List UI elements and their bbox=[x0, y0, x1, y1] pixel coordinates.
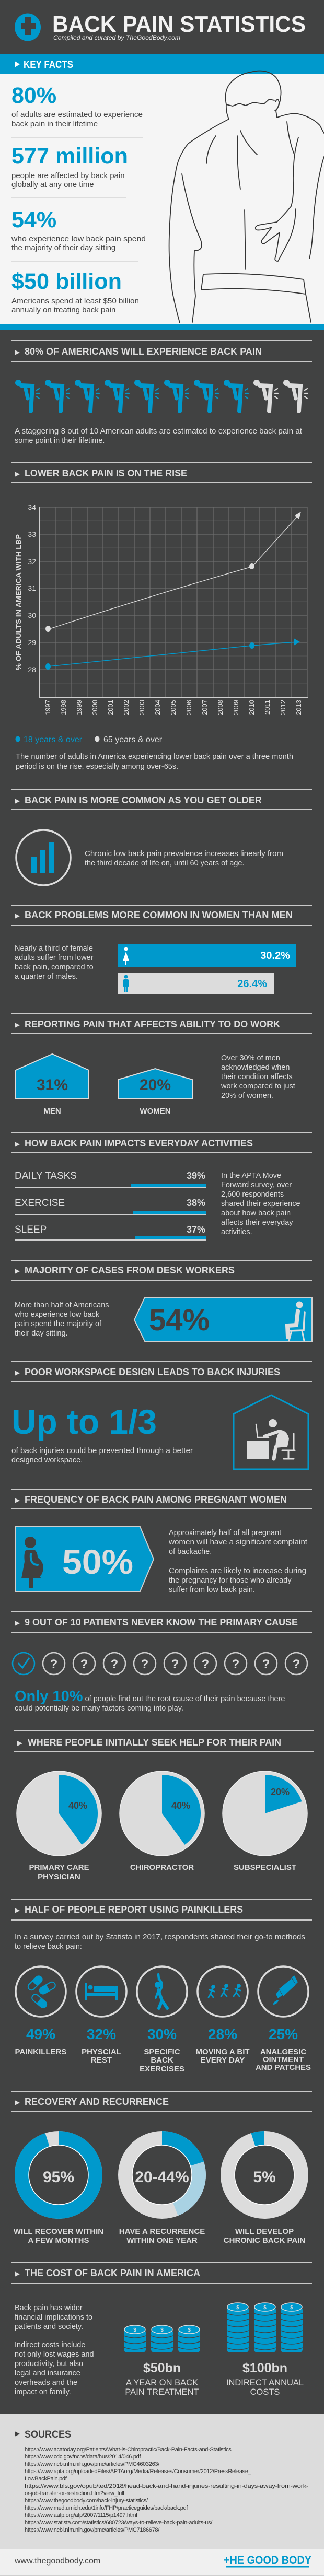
fact: 54%: 54% bbox=[11, 207, 56, 232]
fact: 577 million: people are affected by back pain bbox=[11, 171, 125, 180]
text: only 10%: Only 10% of people find out the root cause of their pain because there bbox=[15, 1688, 285, 1705]
donut: 5%: CHRONIC BACK PAIN bbox=[224, 2236, 305, 2245]
icons: check and question circles: ? bbox=[111, 1657, 118, 1671]
item: ointment 25%: AND PATCHES bbox=[256, 2063, 311, 2072]
text: women: adults suffer from lower bbox=[15, 954, 94, 962]
coins: $50bn stacks: $ bbox=[188, 2327, 191, 2333]
text: desk: who experience low back bbox=[14, 1310, 100, 1319]
text: APTA: In the APTA Move bbox=[221, 1172, 281, 1180]
icons: check and question circles: ? bbox=[50, 1657, 57, 1671]
text: APTA: activities. bbox=[221, 1228, 252, 1236]
bars: activities: SLEEP bbox=[15, 1224, 47, 1235]
icons: check and question circles: ? bbox=[262, 1657, 270, 1671]
coins: $50bn stacks: $ bbox=[133, 2327, 136, 2333]
text: cost: Indirect costs include bbox=[15, 2341, 85, 2349]
y axis labels: 31 bbox=[28, 584, 36, 592]
series: 65 and over bbox=[45, 512, 301, 632]
icon: plus logo bbox=[15, 14, 41, 41]
text: desk: More than half of Americans bbox=[15, 1301, 109, 1309]
text: desk: their day sitting. bbox=[15, 1329, 68, 1338]
y axis labels bbox=[28, 503, 36, 674]
x axis year labels: 2013 bbox=[295, 700, 303, 715]
heading: lower back pain: LOWER BACK PAIN IS ON THE RISE bbox=[25, 468, 187, 478]
legend: 18 years & over bbox=[24, 735, 83, 744]
stat: $100bn bbox=[226, 2361, 304, 2397]
coins: $100bn stacks bbox=[227, 2303, 303, 2352]
text: staggering: A staggering 8 out of 10 American adults are estimated to experience back pain at bbox=[15, 427, 302, 436]
bars: activities: EXERCISE bbox=[15, 1198, 65, 1209]
bar: male 26.4% bbox=[118, 973, 274, 994]
text: cost: impact on family. bbox=[15, 2388, 71, 2396]
heading: pregnant bbox=[11, 1489, 312, 1509]
item: moving 28%: 28% bbox=[208, 2026, 237, 2042]
text: work: acknowledged when bbox=[221, 1063, 290, 1072]
donut: 95%: 95% bbox=[43, 2169, 74, 2186]
y axis labels: 30 bbox=[28, 611, 36, 619]
item: back exercises 30%: BACK bbox=[151, 2056, 173, 2065]
panel: sources: https://www.med.umich.edu/1info/FHP/practiceguides/back/back.pdf bbox=[25, 2505, 188, 2511]
heading: primary cause: 9 OUT OF 10 PATIENTS NEVER KNOW THE PRIMARY CAUSE bbox=[25, 1617, 298, 1627]
legend bbox=[16, 735, 163, 744]
bars: activities: 39% bbox=[187, 1170, 205, 1181]
icons: check and question circles: ? bbox=[141, 1657, 148, 1671]
item: painkillers 49% bbox=[15, 1966, 66, 2056]
subtitle: Compiled and curated by TheGoodBody.com bbox=[53, 34, 180, 41]
text: older bbox=[85, 850, 283, 868]
panel: key facts bbox=[0, 71, 324, 324]
bar: female 30.2%: 30.2% bbox=[260, 950, 290, 962]
icons: check and question circles: ? bbox=[232, 1657, 239, 1671]
icons: check and question circles: ? bbox=[202, 1657, 209, 1671]
x axis year labels: 2003 bbox=[138, 700, 146, 715]
footer: www.thegoodbody.com bbox=[14, 2557, 100, 2566]
heading: workspace bbox=[11, 1362, 312, 1381]
house: women 20% bbox=[118, 1069, 192, 1116]
donut: 95%: A FEW MONTHS bbox=[28, 2236, 89, 2245]
y axis labels: 29 bbox=[28, 638, 36, 647]
pie: primary care: PHYSICIAN bbox=[38, 1872, 80, 1881]
x axis year labels: 2005 bbox=[169, 700, 177, 715]
text: statista: In a survey carried out by Statista in 2017, respondents shared their go-to methods bbox=[15, 1933, 305, 1941]
heading: seek help bbox=[14, 1731, 314, 1752]
heading: desk workers: MAJORITY OF CASES FROM DESK WORKERS bbox=[25, 1265, 235, 1275]
pie: primary care bbox=[17, 1771, 101, 1881]
text: staggering bbox=[15, 427, 302, 445]
logo: +HE GOOD BODY bbox=[224, 2554, 311, 2567]
house: men 31%: 31% bbox=[37, 1076, 68, 1094]
house: women 20%: WOMEN bbox=[140, 1107, 171, 1116]
pie: subspecialist bbox=[223, 1771, 307, 1872]
heading: work bbox=[11, 1013, 312, 1034]
coins: $50bn stacks: $ bbox=[160, 2327, 164, 2333]
icon: seated person bbox=[287, 1302, 305, 1341]
stat: $100bn: INDIRECT ANNUAL bbox=[226, 2378, 304, 2387]
fact: 80%: 80% bbox=[11, 83, 56, 108]
donut: 20-44%: HAVE A RECURRENCE bbox=[119, 2227, 205, 2236]
item: moving 28%: MOVING A BIT bbox=[195, 2047, 250, 2056]
text: work: their condition affects bbox=[221, 1073, 293, 1081]
x axis year labels: 2002 bbox=[122, 700, 130, 715]
text: women bbox=[15, 944, 94, 981]
x axis year labels: 2004 bbox=[154, 700, 161, 715]
coins: $100bn stacks: $ bbox=[236, 2305, 239, 2311]
text: work: 20% of women. bbox=[221, 1092, 273, 1100]
y axis labels: 32 bbox=[28, 557, 36, 566]
stat: $100bn: $100bn bbox=[242, 2361, 287, 2375]
text: cost: patients and society. bbox=[15, 2323, 83, 2331]
donut: 5%: 5% bbox=[253, 2169, 276, 2186]
text: work: Over 30% of men bbox=[221, 1054, 280, 1062]
text: work: work compared to just bbox=[221, 1082, 295, 1091]
item: painkillers 49%: PAINKILLERS bbox=[15, 2047, 66, 2056]
x axis year labels bbox=[44, 700, 303, 715]
donut: 20-44%: 20-44% bbox=[135, 2169, 189, 2186]
icons: check and question circles bbox=[13, 1653, 307, 1675]
fact: 80%: of adults are estimated to experience bbox=[11, 110, 143, 119]
fact: 577 million bbox=[11, 144, 128, 189]
header bbox=[0, 0, 324, 54]
heading: workspace: POOR WORKSPACE DESIGN LEADS TO BACK INJURIES bbox=[25, 1367, 280, 1377]
title: BACK PAIN STATISTICS bbox=[52, 11, 306, 37]
key facts band: KEY FACTS bbox=[24, 59, 73, 71]
text: women: Nearly a third of female bbox=[15, 944, 93, 953]
x axis year labels: 1997 bbox=[44, 700, 52, 715]
panel: sources: https://www.ncbi.nlm.nih.gov/pmc/articles/PMC4603263/ bbox=[25, 2461, 160, 2467]
text: pregnant: the pregnancy for those who already bbox=[169, 1576, 292, 1585]
panel: sources: https://www.acatoday.org/Patients/What-is-Chiropractic/Back-Pain-Facts-and-Statistics bbox=[25, 2446, 232, 2453]
pie: subspecialist: 20% bbox=[271, 1787, 290, 1797]
heading: 80% of americans bbox=[11, 341, 312, 361]
text: cost bbox=[15, 2304, 94, 2396]
icon: desk worker house bbox=[234, 1395, 308, 1469]
pie: primary care: 40% bbox=[68, 1800, 87, 1811]
pie: primary care: PRIMARY CARE bbox=[29, 1863, 89, 1872]
stat: up to 1/3 bbox=[11, 1402, 193, 1465]
text: cost: financial implications to bbox=[15, 2313, 92, 2322]
text: pregnant: Complaints are likely to increase during bbox=[169, 1567, 306, 1575]
fact: 54%: the majority of their day sitting bbox=[11, 243, 115, 252]
text: older: Chronic low back pain prevalence increases linearly from bbox=[85, 850, 283, 858]
heading: seek help: WHERE PEOPLE INITIALLY SEEK HELP FOR THEIR PAIN bbox=[28, 1737, 281, 1748]
stat: $50bn: A YEAR ON BACK bbox=[126, 2378, 198, 2387]
fact: 54%: who experience low back pain spend bbox=[11, 235, 146, 243]
item: moving 28% bbox=[195, 1966, 250, 2065]
item: physical rest 32%: PHYSCIAL bbox=[82, 2047, 121, 2056]
bars: activities bbox=[15, 1170, 206, 1241]
house: men 31%: MEN bbox=[43, 1107, 61, 1116]
item: ointment 25%: 25% bbox=[269, 2026, 298, 2042]
item: back exercises 30%: 30% bbox=[147, 2026, 177, 2042]
x axis year labels: 1998 bbox=[60, 700, 67, 715]
heading: women vs men: BACK PROBLEMS MORE COMMON IN WOMEN THAN MEN bbox=[25, 910, 293, 920]
x axis year labels: 2009 bbox=[232, 700, 240, 715]
item: back exercises 30%: SPECIFIC bbox=[144, 2047, 180, 2056]
fact: 54% bbox=[11, 207, 146, 252]
pie: chiropractor: CHIROPRACTOR bbox=[130, 1863, 194, 1872]
panel: sources: SOURCES bbox=[25, 2429, 71, 2440]
y axis labels: 28 bbox=[28, 665, 36, 674]
text: APTA: affects their everyday bbox=[221, 1219, 293, 1227]
heading: women vs men bbox=[11, 905, 312, 926]
heading: everyday: HOW BACK PAIN IMPACTS EVERYDAY ACTIVITIES bbox=[25, 1138, 253, 1149]
x axis year labels: 1999 bbox=[75, 700, 83, 715]
heading: recovery: RECOVERY AND RECURRENCE bbox=[25, 2097, 169, 2107]
heading: older: BACK PAIN IS MORE COMMON AS YOU GET OLDER bbox=[25, 795, 262, 805]
y axis labels: 34 bbox=[28, 503, 36, 511]
text: pregnant bbox=[168, 1529, 307, 1594]
text: only 10% bbox=[15, 1688, 285, 1713]
item: back exercises 30%: EXERCISES bbox=[140, 2065, 184, 2074]
bars: activities: DAILY TASKS bbox=[15, 1170, 77, 1181]
heading: 80% of americans: 80% OF AMERICANS WILL EXPERIENCE BACK PAIN bbox=[25, 346, 262, 357]
text: cost: overheads and the bbox=[15, 2379, 77, 2387]
item: ointment 25%: OINTMENT bbox=[263, 2055, 304, 2064]
donut: 20-44%: WITHIN ONE YEAR bbox=[126, 2236, 198, 2245]
text: women: back pain, compared to bbox=[15, 963, 94, 971]
fact: $50 billion bbox=[11, 269, 139, 314]
coins: $100bn stacks: $ bbox=[290, 2305, 293, 2311]
fact: $50 billion: Americans spend at least $50 billion bbox=[11, 297, 139, 306]
icons: check and question circles: ? bbox=[293, 1657, 300, 1671]
text: APTA: about how back pain bbox=[221, 1209, 291, 1217]
heading: cost bbox=[11, 2263, 312, 2284]
series: 18 and over bbox=[45, 638, 300, 670]
text: cost: not only lost wages and bbox=[15, 2350, 94, 2359]
panel: sources bbox=[0, 2414, 324, 2549]
text: APTA bbox=[221, 1172, 300, 1236]
panel: sources: https://www.bls.gov/opub/ted/2018/head-back-and-hand-injuries-resulting-in-days-away-from-work- bbox=[25, 2483, 309, 2489]
icon: pregnant woman bbox=[21, 1537, 43, 1588]
text: older: the third decade of life on, until 60 years of age. bbox=[85, 859, 245, 868]
icons: 10 bending people bbox=[15, 380, 308, 411]
bar: male 26.4%: 26.4% bbox=[237, 978, 267, 990]
x axis year labels: 2001 bbox=[107, 700, 114, 715]
x axis year labels: 2007 bbox=[201, 700, 209, 715]
item: physical rest 32%: 32% bbox=[87, 2026, 116, 2042]
stat: $50bn bbox=[125, 2361, 199, 2397]
house: women 20%: 20% bbox=[140, 1076, 171, 1094]
text: pregnant: Approximately half of all pregnant bbox=[169, 1529, 281, 1537]
fact: $50 billion: annually on treating back pain bbox=[11, 306, 115, 314]
text: women: a quarter of males. bbox=[15, 973, 78, 981]
donut: 95%: WILL RECOVER WITHIN bbox=[14, 2227, 103, 2236]
banner: 54%: 54% bbox=[149, 1303, 210, 1337]
text: rise bbox=[16, 753, 293, 771]
item: ointment 25% bbox=[256, 1966, 311, 2072]
text: only 10%: could potentially be many factors coming into play. bbox=[15, 1704, 183, 1713]
heading: everyday bbox=[11, 1133, 312, 1153]
coins: $100bn stacks: $ bbox=[263, 2305, 267, 2311]
fact: 577 million: 577 million bbox=[11, 144, 128, 169]
donut: 5% bbox=[224, 2138, 305, 2245]
text: rise: The number of adults in America experiencing lower back pain over a three month bbox=[16, 753, 293, 761]
item: physical rest 32% bbox=[76, 1966, 126, 2065]
text: rise: period is on the rise, especially among over-65s. bbox=[16, 763, 178, 771]
key facts band bbox=[0, 54, 324, 74]
item: painkillers 49%: 49% bbox=[26, 2026, 55, 2042]
bars: activities: 37% bbox=[187, 1224, 205, 1235]
y axis title: % OF ADULTS IN AMERICA WITH LBP bbox=[14, 534, 22, 670]
heading: pregnant: FREQUENCY OF BACK PAIN AMONG PREGNANT WOMEN bbox=[25, 1494, 287, 1505]
text: pregnant: suffer from low back pain. bbox=[169, 1586, 255, 1594]
heading: cost: THE COST OF BACK PAIN IN AMERICA bbox=[25, 2268, 200, 2278]
line chart bbox=[14, 503, 308, 715]
coins: $50bn stacks bbox=[124, 2325, 200, 2352]
panel: sources: LowBackPain.pdf bbox=[25, 2476, 67, 2482]
text: pregnant: of backache. bbox=[169, 1548, 212, 1556]
text: desk bbox=[14, 1301, 109, 1338]
legend: 65 years & over bbox=[103, 735, 163, 744]
panel: sources: https://www.ncbi.nlm.nih.gov/pmc/articles/PMC7186678/ bbox=[25, 2527, 160, 2533]
heading: desk workers bbox=[11, 1260, 312, 1280]
panel: sources: https://www.thegoodbody.com/back-injury-statistics/ bbox=[25, 2498, 148, 2504]
text: cost: productivity, but also bbox=[15, 2360, 83, 2368]
text: desk: pain spend the majority of bbox=[15, 1320, 102, 1328]
stat: $50bn: $50bn bbox=[143, 2361, 181, 2375]
footer bbox=[0, 2549, 324, 2576]
pie: chiropractor: 40% bbox=[171, 1800, 190, 1811]
stat: $50bn: PAIN TREATMENT bbox=[125, 2387, 199, 2397]
text: statista bbox=[15, 1933, 305, 1951]
fact: 80% bbox=[11, 83, 143, 128]
bar: female 30.2% bbox=[118, 944, 296, 967]
icons: check and question circles: ? bbox=[80, 1657, 88, 1671]
stat: up to 1/3: of back injuries could be prevented through a better bbox=[11, 1447, 193, 1455]
text: staggering: some point in their lifetime. bbox=[15, 437, 105, 445]
fact: 80%: back pain in their lifetime bbox=[11, 120, 98, 128]
x axis year labels: 2010 bbox=[248, 700, 256, 715]
heading: work: REPORTING PAIN THAT AFFECTS ABILITY TO DO WORK bbox=[25, 1019, 280, 1029]
heading: painkillers: HALF OF PEOPLE REPORT USING PAINKILLERS bbox=[25, 1904, 243, 1915]
item: physical rest 32%: REST bbox=[91, 2056, 112, 2065]
fact: $50 billion: $50 billion bbox=[11, 269, 122, 294]
text: APTA: Forward survey, over bbox=[221, 1181, 292, 1189]
pie: chiropractor bbox=[120, 1771, 204, 1872]
heading: primary cause bbox=[11, 1612, 312, 1632]
panel: sources: https://www.statista.com/statistics/680723/ways-to-relieve-back-pain-adults-us/ bbox=[25, 2520, 213, 2526]
item: moving 28%: EVERY DAY bbox=[201, 2056, 245, 2065]
text: APTA: 2,600 respondents bbox=[221, 1190, 284, 1199]
stat: up to 1/3: designed workspace. bbox=[11, 1456, 83, 1465]
x axis year labels: 2011 bbox=[263, 700, 271, 715]
text: work bbox=[221, 1054, 295, 1100]
x axis year labels: 2000 bbox=[91, 700, 99, 715]
text: pregnant: women will have a significant complaint bbox=[168, 1538, 307, 1547]
text: cost: legal and insurance bbox=[15, 2369, 80, 2378]
heading: older bbox=[11, 790, 312, 810]
stat: $100bn: COSTS bbox=[250, 2387, 280, 2397]
text: APTA: shared their experience bbox=[221, 1200, 300, 1208]
panel: sources: https://www.cdc.gov/nchs/data/hus/2014/046.pdf bbox=[25, 2454, 141, 2460]
item: back exercises 30% bbox=[137, 1966, 187, 2074]
stat: up to 1/3: Up to 1/3 bbox=[11, 1402, 157, 1441]
pie: subspecialist: SUBSPECIALIST bbox=[234, 1863, 296, 1872]
x axis year labels: 2006 bbox=[185, 700, 193, 715]
y axis labels: 33 bbox=[28, 530, 36, 538]
heading: recovery bbox=[11, 2091, 312, 2112]
heading: lower back pain bbox=[11, 462, 312, 483]
heading: painkillers bbox=[11, 1899, 312, 1920]
banner: 50% bbox=[15, 1527, 154, 1591]
text: statista: to relieve back pain: bbox=[15, 1942, 82, 1951]
donut: 20-44% bbox=[119, 2138, 205, 2245]
panel: sources: or-job-transfer-or-restriction.htm?view_full bbox=[25, 2490, 124, 2497]
banner: 50%: 50% bbox=[62, 1542, 133, 1581]
icons: check and question circles: ? bbox=[171, 1657, 179, 1671]
bars: activities: 38% bbox=[187, 1198, 205, 1208]
illustration: man holding back bbox=[169, 71, 324, 323]
donut: 95% bbox=[14, 2138, 103, 2245]
icon: bar chart circle bbox=[16, 830, 71, 885]
house: men 31% bbox=[16, 1054, 89, 1116]
panel: sources: https://www.aafp.org/afp/2007/1115/p1497.html bbox=[25, 2512, 137, 2519]
fact: 577 million: globally at any one time bbox=[11, 180, 94, 189]
donut: 5%: WILL DEVELOP bbox=[235, 2227, 294, 2236]
panel: sources: https://www.apta.org/uploadedFiles/APTAorg/Media/Releases/Consumer/2012/PressRelease_ bbox=[25, 2468, 252, 2475]
text: cost: Back pain has wider bbox=[15, 2304, 83, 2312]
x axis year labels: 2012 bbox=[279, 700, 287, 715]
x axis year labels: 2008 bbox=[216, 700, 224, 715]
banner: 54% bbox=[134, 1297, 312, 1341]
item: ointment 25%: ANALGESIC bbox=[260, 2047, 306, 2056]
